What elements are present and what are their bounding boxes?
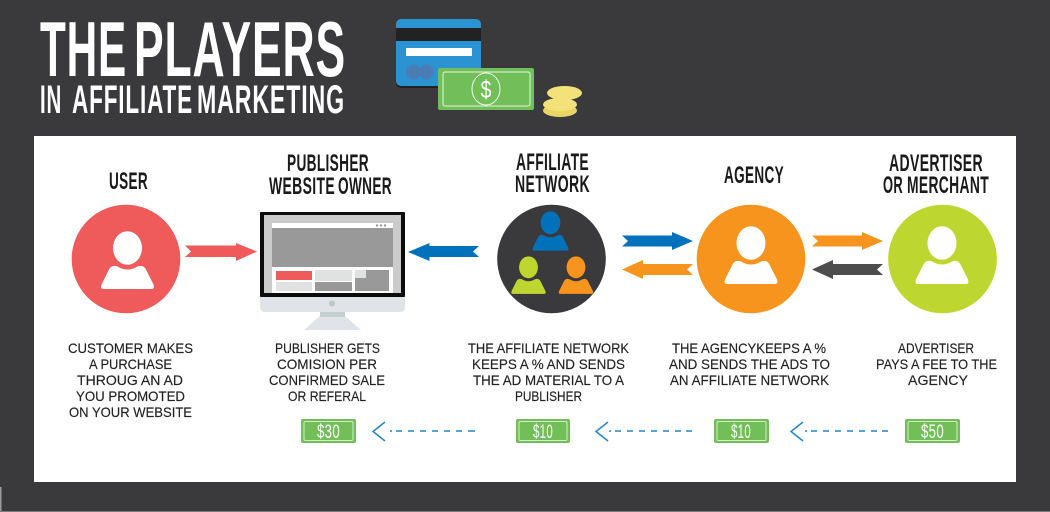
arrow: advertiser to agency — [812, 260, 883, 279]
icon: advertiser circle — [888, 205, 997, 313]
heading: advertiser or merchant: OR — [883, 172, 903, 199]
arrow: agency to advertiser — [812, 232, 883, 250]
heading: publisher website owner: WEBSITE — [269, 173, 335, 200]
text: affiliate network description — [468, 340, 630, 404]
arrow: dashed advertiser to agency — [791, 422, 888, 441]
arrow: dashed agency to network — [596, 422, 692, 441]
text: affiliate network description: THE AFFILIATE NETWORK — [468, 340, 630, 356]
title: IN — [40, 78, 62, 122]
text: user description: YOU PROMOTED — [76, 388, 185, 404]
heading: advertiser or merchant — [883, 150, 989, 199]
text: user description: ON YOUR WEBSITE — [69, 404, 192, 420]
text: agency description — [669, 340, 830, 388]
arrow: user to publisher — [185, 243, 257, 261]
text: publisher description: COMISION PER — [277, 356, 377, 372]
heading: advertiser or merchant: ADVERTISER — [889, 150, 983, 177]
panel: players flow — [34, 136, 1016, 482]
text: agency description: AND SENDS THE ADS TO — [669, 356, 830, 372]
text: publisher description: PUBLISHER GETS — [275, 340, 380, 356]
text: affiliate network description: PUBLISHER — [515, 388, 582, 404]
title — [40, 5, 346, 122]
icon: publisher monitor — [260, 212, 405, 330]
text: advertiser description: AGENCY — [908, 372, 969, 388]
money chip: $30: $30 — [317, 422, 340, 443]
heading: publisher website owner — [269, 150, 392, 200]
text: affiliate network description: KEEPS A % AND SENDS — [472, 356, 625, 372]
money chip: $50 — [905, 419, 960, 443]
title: AFFILIATE — [72, 78, 193, 122]
arrow: dashed $50 flow to $30 — [373, 422, 475, 441]
heading: publisher website owner: PUBLISHER — [287, 150, 369, 177]
icon: credit card, banknote and coins: $ — [480, 76, 492, 104]
money chip: $30 — [301, 419, 356, 443]
text: advertiser description: ADVERTISER — [898, 340, 974, 356]
heading: publisher website owner: OWNER — [338, 173, 392, 200]
arrow: network to agency — [622, 232, 693, 250]
text: advertiser description: PAYS A FEE TO THE — [876, 356, 997, 372]
title: MARKETING — [197, 78, 345, 122]
heading: agency: AGENCY — [724, 162, 784, 189]
money chip: $10 network — [516, 419, 570, 443]
text: agency description: AN AFFILIATE NETWORK — [670, 372, 830, 388]
text: publisher description: OR REFERAL — [288, 388, 366, 404]
money chip: $10 agency: $10 — [731, 422, 751, 443]
money chip: $50: $50 — [921, 422, 944, 443]
text: publisher description: CONFIRMED SALE — [269, 372, 385, 388]
money chip: $10 network: $10 — [533, 422, 553, 443]
money chip: $10 agency — [714, 419, 769, 443]
text: advertiser description — [876, 340, 997, 388]
icon: credit card, banknote and coins — [396, 19, 582, 117]
text: user description: CUSTOMER MAKES — [68, 340, 193, 356]
text: affiliate network description: THE AD MATERIAL TO A — [473, 372, 625, 388]
title: THE — [40, 5, 127, 93]
arrow: agency to network — [622, 260, 693, 279]
text: user description: THROUG AN AD — [77, 372, 183, 388]
icon: user circle — [72, 205, 180, 313]
icon: affiliate network circle — [497, 205, 606, 313]
arrow: network to publisher — [408, 243, 479, 261]
heading: affiliate network — [515, 149, 590, 198]
heading: affiliate network: AFFILIATE — [516, 149, 589, 176]
text: user description — [68, 340, 193, 420]
title: PLAYERS — [134, 5, 346, 93]
heading: advertiser or merchant: MERCHANT — [907, 172, 989, 199]
icon: agency circle — [697, 205, 805, 313]
text: user description: A PURCHASE — [89, 356, 172, 372]
heading: affiliate network: NETWORK — [515, 171, 590, 198]
text: publisher description — [269, 340, 385, 404]
heading: user: USER — [109, 168, 148, 195]
text: agency description: THE AGENCYKEEPS A % — [672, 340, 826, 356]
